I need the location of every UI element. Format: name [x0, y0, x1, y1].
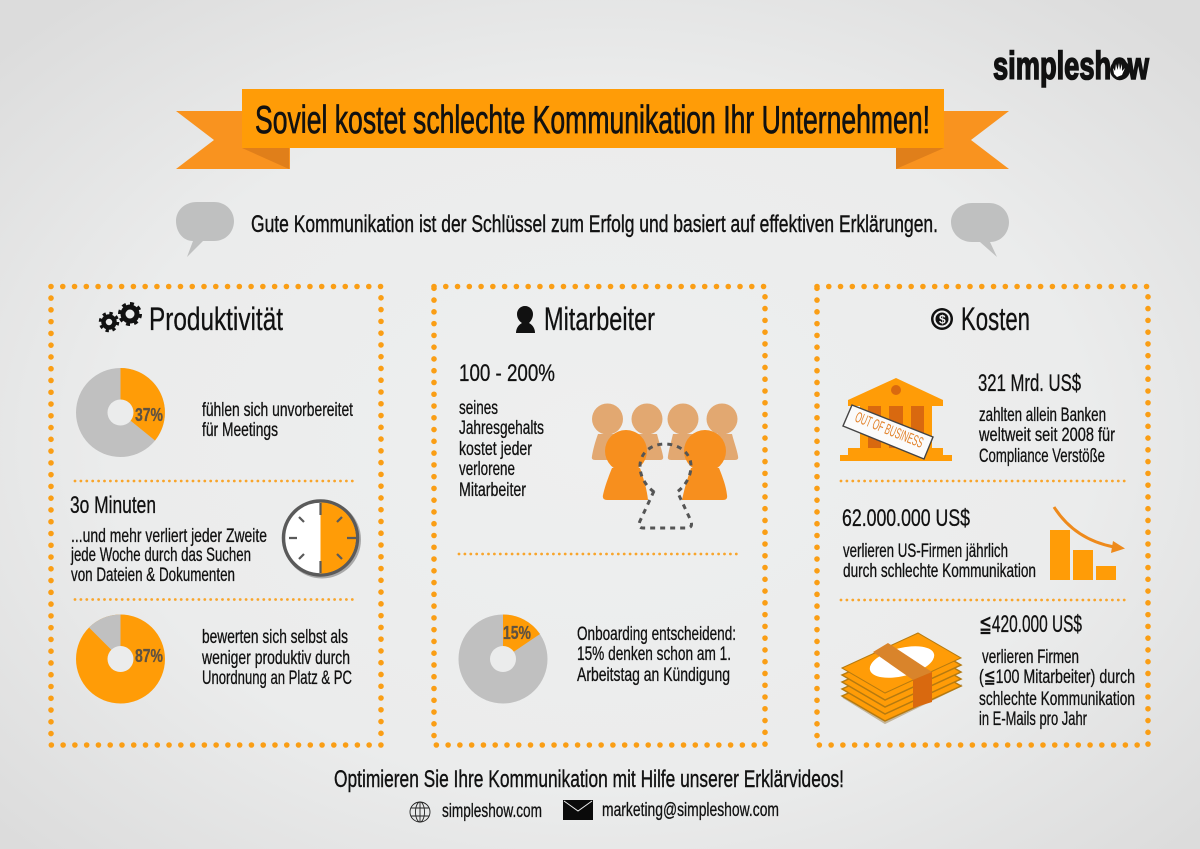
bar chart with falling arrow — [1050, 507, 1125, 580]
text: Onboarding: Arbeitstag an Kündigung — [577, 665, 730, 686]
text: 100 - 200%: seines — [459, 398, 498, 419]
text: 321 Mrd: weltweit seit 2008 für — [978, 425, 1116, 446]
website: simpleshow.com — [442, 801, 542, 822]
icon: people group — [592, 404, 738, 528]
text: 100 - 200%: Mitarbeiter — [459, 480, 527, 501]
heading: Mitarbeiter: Mitarbeiter — [544, 301, 655, 337]
text: Unordnung: Unordnung an Platz & PC — [202, 668, 352, 689]
text: Onboarding: 15% denken schon am 1. — [577, 644, 731, 665]
pie chart 37%: 37% — [135, 405, 163, 425]
text: Unordnung: weniger produktiv durch — [201, 648, 350, 669]
text: unvorbereitet — [202, 400, 354, 441]
text: 62.000.000: verlieren US-Firmen jährlich — [843, 541, 1008, 562]
icon: money stack — [842, 633, 962, 723]
text: 100 - 200% — [459, 360, 555, 501]
text: 321 Mrd: Compliance Verstöße — [979, 446, 1105, 467]
text: 420.000: in E-Mails pro Jahr — [979, 709, 1087, 730]
text: 100 - 200%: 100 - 200% — [459, 360, 555, 387]
icon: clock — [283, 500, 361, 578]
icon: globe — [410, 802, 430, 822]
text: 321 Mrd: 321 Mrd. US$ — [978, 370, 1081, 397]
panel: Mitarbeiter — [434, 286, 765, 745]
text: 30 Minuten: 3o Minuten — [70, 492, 156, 519]
text: 30 Minuten: ...und mehr verliert jeder Zweite — [71, 526, 267, 547]
text: Onboarding — [577, 624, 736, 686]
icon: gears — [100, 304, 140, 330]
text: 420.000: verlieren Firmen — [982, 647, 1079, 668]
icon: bank out of business: OUT OF BUSINESS — [853, 409, 926, 452]
text: 100 - 200%: kostet jeder — [459, 439, 532, 460]
text: 321 Mrd — [978, 370, 1116, 467]
text: 62.000.000: 62.000.000 US$ — [842, 505, 970, 532]
text: Unordnung: bewerten sich selbst als — [202, 627, 348, 648]
text: 321 Mrd: zahlten allein Banken — [979, 405, 1106, 426]
text: 30 Minuten: von Dateien & Dokumenten — [71, 565, 235, 586]
pie chart 37% — [76, 368, 165, 457]
pie chart 15% — [458, 614, 548, 704]
heading: Kosten: Kosten — [961, 301, 1030, 337]
icon: coin — [931, 308, 953, 330]
text: unvorbereitet: für Meetings — [202, 420, 278, 441]
text: 62.000.000: durch schlechte Kommunikation — [843, 561, 1036, 582]
text: 100 - 200%: verlorene — [459, 459, 515, 480]
text: 420.000: ≦420.000 US$ — [979, 611, 1082, 638]
panel: Kosten — [817, 286, 1148, 745]
icon: person — [516, 306, 535, 333]
email: marketing@simpleshow.com — [602, 800, 779, 821]
panel: Produktivität — [51, 286, 381, 745]
pie chart 15%: 15% — [503, 623, 531, 643]
icon: envelope — [563, 800, 593, 820]
pie chart 87% — [76, 614, 165, 704]
text: 30 Minuten — [70, 492, 267, 586]
pie chart 87%: 87% — [135, 646, 163, 666]
text: Unordnung — [201, 627, 352, 689]
text: 420.000 — [979, 611, 1135, 730]
title banner — [176, 89, 1009, 169]
speech bubble right — [951, 203, 1009, 257]
text: 100 - 200%: Jahresgehalts — [459, 418, 544, 439]
text: 420.000: (≦100 Mitarbeiter) durch — [979, 667, 1135, 688]
text: 30 Minuten: jede Woche durch das Suchen — [70, 545, 251, 566]
icon: coin: $ — [939, 312, 946, 326]
icon: bank out of business — [840, 378, 952, 461]
text: 420.000: schlechte Kommunikation — [979, 689, 1135, 710]
text: 62.000.000 — [842, 505, 1036, 582]
text: Onboarding: Onboarding entscheidend: — [577, 624, 736, 645]
footer call to action: Optimieren Sie Ihre Kommunikation mit Hilfe unserer Erklärvideos! — [334, 766, 844, 793]
heading: Produktivität: Produktivität — [149, 301, 283, 337]
subtitle: Gute Kommunikation ist der Schlüssel zum Erfolg und basiert auf effektiven Erklärungen. — [251, 211, 938, 238]
speech bubble left — [176, 202, 234, 257]
text: unvorbereitet: fühlen sich unvorbereitet — [202, 400, 354, 421]
